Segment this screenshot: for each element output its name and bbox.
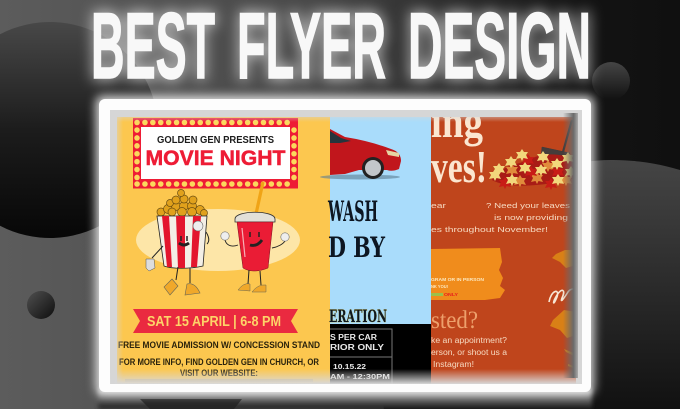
orange brush panel: NK YOU! [431, 284, 448, 289]
date banner: SAT 15 APRIL | 6-8 PM [147, 313, 281, 330]
icon: rake [541, 120, 572, 156]
marquee sign: MOVIE NIGHT [146, 147, 286, 170]
leaves body copy: es throughout November! [431, 225, 548, 234]
ticket details: RIOR ONLY [330, 343, 385, 352]
leaves headline: ing [431, 96, 483, 147]
ticket details: AM - 12:30PM [330, 372, 390, 381]
leaves headline: ves! [431, 141, 487, 192]
contact copy [431, 336, 508, 369]
ticket details: S PER CAR [330, 333, 377, 342]
icon: squiggle [549, 289, 576, 303]
event details [118, 340, 320, 378]
event details: VISIT OUR WEBSITE: [180, 368, 258, 378]
car wash headline: D BY [328, 231, 386, 264]
leaves body copy: ear [431, 201, 447, 210]
icon: soda cup [221, 182, 289, 292]
panel: movie night flyer [117, 117, 330, 384]
car wash headline: ERATION [329, 307, 387, 327]
leaves body copy: ? Need your leaves [486, 201, 570, 210]
event details: FREE MOVIE ADMISSION W/ CONCESSION STAND [118, 340, 320, 350]
panel: raking leaves flyer [431, 96, 577, 384]
ticket details [330, 329, 392, 384]
leaves headline [431, 117, 484, 182]
interested headline: sted? [431, 307, 478, 334]
marquee sign [133, 118, 298, 188]
icon: red car [320, 129, 401, 180]
autumn leaf icons [550, 250, 572, 367]
leaves body copy: is now providing [494, 213, 568, 222]
event details: FOR MORE INFO, FIND GOLDEN GEN IN CHURCH, OR [119, 357, 319, 367]
date banner [133, 309, 298, 333]
orange brush panel: ONLY [444, 292, 458, 297]
title [91, 0, 591, 98]
marquee sign: GOLDEN GEN PRESENTS [157, 135, 274, 146]
orange brush panel: GRAM OR IN PERSON [431, 277, 484, 282]
ticket details: 10.15.22 [333, 362, 366, 371]
screen edge fades [110, 111, 582, 384]
contact copy: Instagram! [433, 360, 474, 369]
car wash headline: WASH [327, 195, 378, 228]
glowing frame [96, 96, 594, 394]
car wash headline [327, 195, 387, 327]
contact copy: ke an appointment? [431, 336, 508, 345]
orange brush panel [431, 248, 505, 300]
cream ellipse [136, 209, 300, 271]
laptop base shadow [98, 388, 592, 409]
contact copy: erson, or shoot us a [431, 348, 508, 357]
icon: popcorn [146, 190, 209, 295]
panel: car wash flyer [320, 117, 432, 384]
leaves body copy [431, 201, 570, 234]
icon: leaf pile [489, 149, 577, 190]
flyer collage [117, 96, 577, 384]
